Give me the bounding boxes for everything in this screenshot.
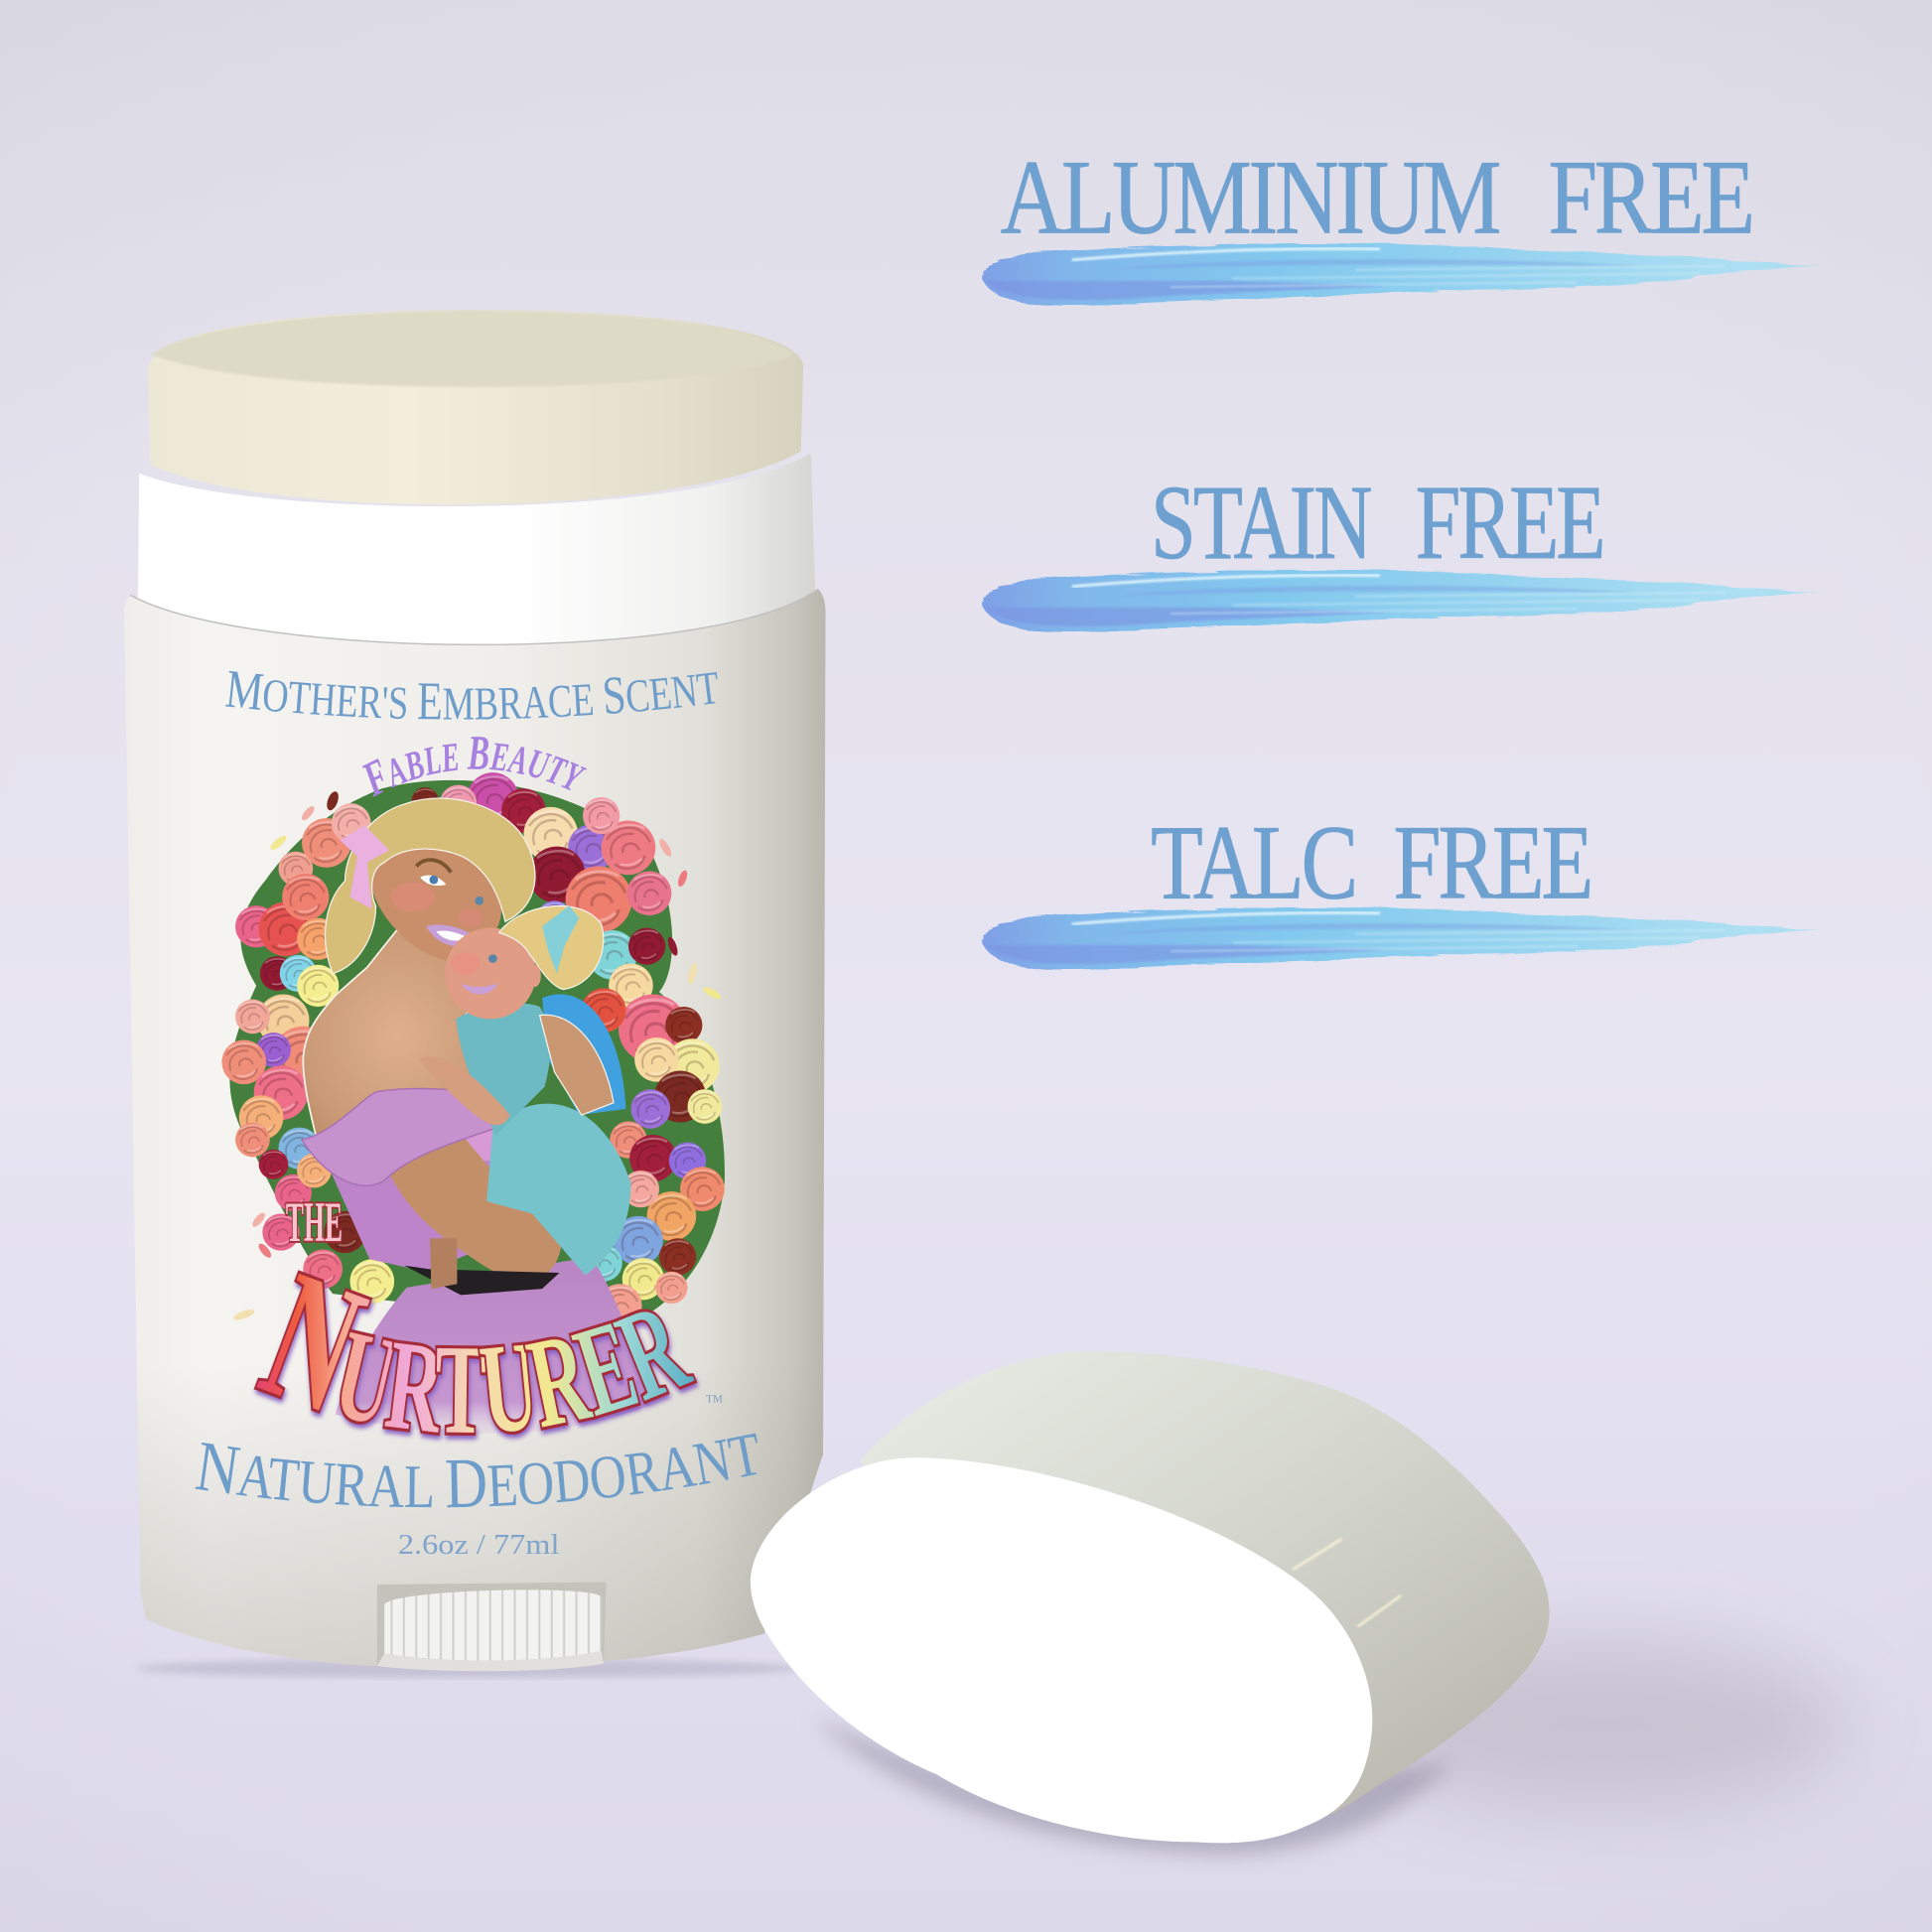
child leg: [430, 1238, 457, 1289]
brand arc: fable beauty: FABLE BEAUTY: [362, 737, 587, 797]
title: nurturer: NURTURER: [252, 1270, 701, 1444]
deodorant stick product: [125, 310, 826, 1672]
label text: natural deodorant: NATURAL DEODORANT: [195, 1434, 758, 1507]
heading: talc free: TALC FREE: [1151, 805, 1590, 922]
child face: [451, 952, 541, 995]
label illustration: mother and child with roses: THE: [286, 1191, 343, 1254]
floor shadows: [136, 1639, 1849, 1855]
removed cap lying on side: [751, 1351, 1550, 1843]
feature callout: stain free: [982, 465, 1821, 632]
feature callout: talc free: [982, 805, 1821, 970]
rose wreath: [221, 772, 725, 1328]
heading: stain free: STAIN FREE: [1151, 465, 1603, 582]
child head: [445, 928, 536, 1019]
trademark: TM: [706, 1393, 723, 1405]
brush stroke: [982, 907, 1821, 970]
skirt: [336, 1257, 650, 1434]
mother's hand: [540, 1015, 614, 1115]
cream deodorant stick: [148, 311, 803, 504]
mother's face: [369, 831, 502, 964]
child dress: [456, 1003, 630, 1276]
sky patch: [428, 964, 625, 1115]
twist wheel: [377, 1583, 607, 1671]
mother's hair: [326, 798, 535, 973]
child hair: [499, 906, 604, 990]
white inner tube: [136, 454, 816, 690]
label text: scent: MOTHER'S EMBRACE SCENT: [225, 671, 718, 719]
label text: size: 2.6oz / 77ml: [398, 1530, 560, 1561]
belt: [404, 1266, 559, 1295]
feature callout: aluminium free: [982, 140, 1821, 306]
dress ruffle: [302, 1089, 524, 1185]
hair ribbon: [341, 826, 389, 909]
brush stroke: [982, 570, 1821, 632]
cap open face: [751, 1457, 1372, 1843]
upper arm: [382, 1128, 562, 1282]
scattered petals: [232, 790, 723, 1322]
cap side wall: [860, 1351, 1550, 1814]
label illustration: mother and child with roses: [221, 737, 725, 1444]
torso: [303, 930, 514, 1165]
brush stroke: [982, 243, 1821, 306]
heading: aluminium free: ALUMINIUM FREE: [1001, 140, 1752, 257]
child bow: [542, 905, 579, 973]
dress bodice: [331, 1111, 523, 1272]
child arm: [419, 1056, 510, 1125]
cap highlights: [1293, 1539, 1401, 1626]
outer container body: [124, 589, 826, 1666]
